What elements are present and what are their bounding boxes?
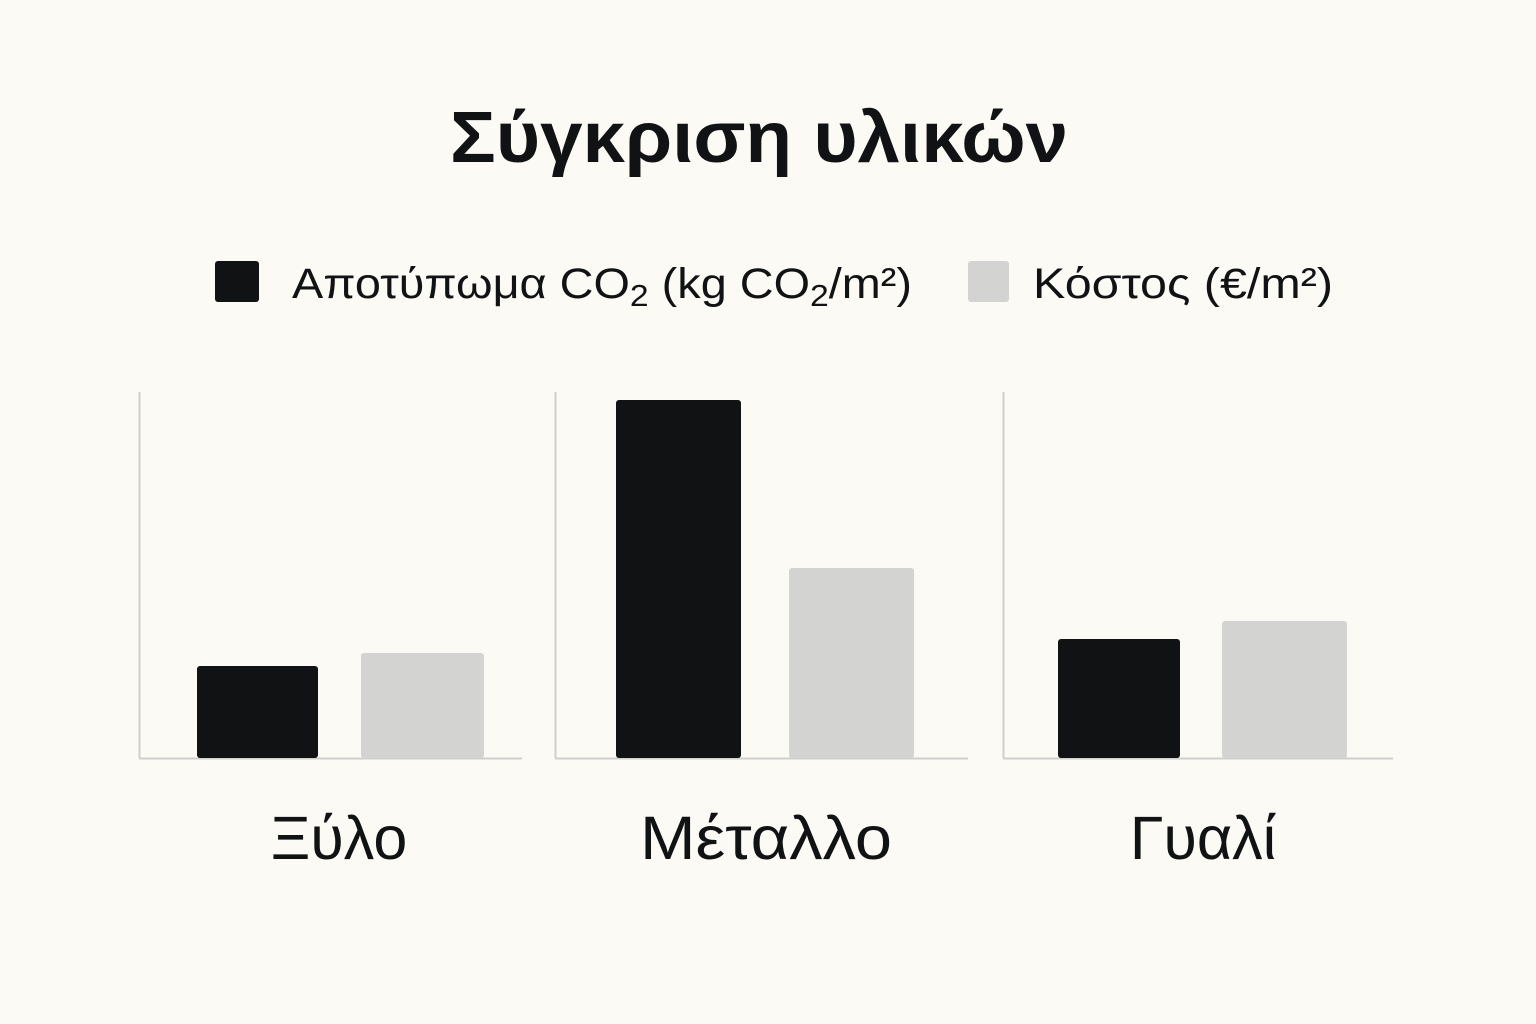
legend item: CO2 footprint: Αποτύπωμα CO	[292, 260, 602, 308]
legend item: CO2 footprint: /m²)	[829, 260, 912, 308]
legend item: CO2 footprint: (kg CO	[649, 260, 810, 308]
bar: metal CO2	[616, 400, 741, 758]
legend item: CO2 footprint: 2	[630, 278, 649, 313]
legend item: CO2 footprint: 2	[810, 278, 829, 313]
legend item: cost: Κόστος (€/m²)	[1033, 260, 1333, 308]
legend	[215, 260, 1333, 313]
label: glass: Γυαλί	[1130, 804, 1276, 872]
chart panel: metal	[555, 392, 968, 872]
title: Σύγκριση υλικών	[450, 98, 1068, 178]
legend item: CO2 footprint	[215, 260, 912, 313]
label: metal: Μέταλλο	[640, 804, 892, 872]
bar: glass cost	[1222, 621, 1347, 758]
chart panel: wood	[139, 392, 522, 872]
label: wood: Ξύλο	[271, 804, 407, 872]
bar: wood CO2	[197, 666, 318, 758]
bar: metal cost	[789, 568, 914, 758]
chart panel: glass	[1003, 392, 1393, 872]
bar: glass CO2	[1058, 639, 1180, 758]
bar: wood cost	[361, 653, 484, 758]
